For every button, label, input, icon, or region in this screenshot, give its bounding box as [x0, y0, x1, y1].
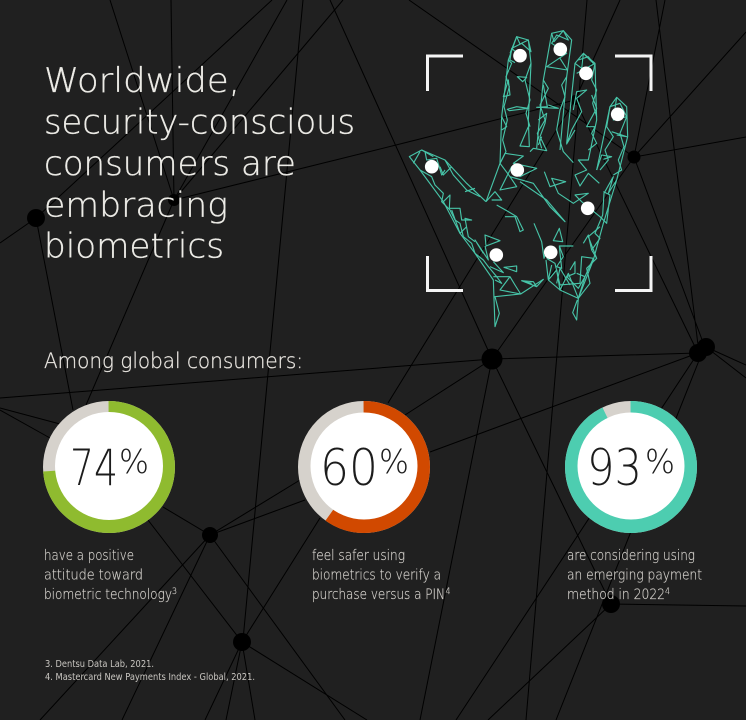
text: stat 74 description: 3: [172, 587, 177, 597]
text: stat 93 description: [567, 548, 702, 603]
text: stat 93 description: an emerging payment: [567, 568, 702, 584]
stat: 60 percent: 60: [320, 439, 378, 497]
text: stat 60 description: purchase versus a PIN: [312, 587, 445, 603]
stat: 74 percent: %: [119, 442, 149, 481]
text: stat 60 description: 4: [446, 587, 450, 597]
text: stat 74 description: attitude toward: [44, 568, 143, 584]
title: Worldwide,: [44, 61, 240, 101]
stat: 74 percent: [50, 408, 168, 526]
text: stat 93 description: are considering using: [567, 548, 695, 564]
text: stat 60 description: feel safer using: [312, 548, 405, 564]
title: embracing: [44, 186, 228, 226]
text: stat 93 description: 4: [665, 587, 670, 597]
text: stat 74 description: biometric technology: [44, 587, 172, 603]
stat: 60 percent: %: [379, 442, 409, 481]
icon: wireframe hand with scan brackets: [409, 31, 651, 327]
text: stat 74 description: have a positive: [44, 548, 134, 564]
subheading: Among global consumers:: [44, 349, 303, 373]
title: security-conscious: [44, 102, 355, 142]
title: biometrics: [44, 226, 224, 266]
text: stat 60 description: biometrics to verify a: [312, 568, 441, 584]
text: stat 93 description: method in 2022: [567, 587, 665, 603]
fingerprint dots: [425, 42, 624, 262]
stat: 93 percent: [572, 408, 690, 526]
footnotes: 3. Dentsu Data Lab, 2021.: [45, 659, 154, 670]
text: stat 74 description: [44, 548, 177, 603]
stat: 74 percent: 74: [70, 439, 118, 497]
title: consumers are: [44, 144, 296, 184]
stat: 93 percent: %: [645, 442, 675, 481]
text: stat 60 description: [312, 548, 450, 603]
scan brackets: [428, 56, 651, 290]
title: [44, 61, 355, 266]
footnotes: [45, 659, 255, 683]
hand mesh: [409, 31, 628, 327]
footnotes: 4. Mastercard New Payments Index - Global, 2021.: [45, 672, 255, 683]
stat: 93 percent: 93: [587, 439, 642, 497]
stat: 60 percent: [306, 408, 422, 526]
